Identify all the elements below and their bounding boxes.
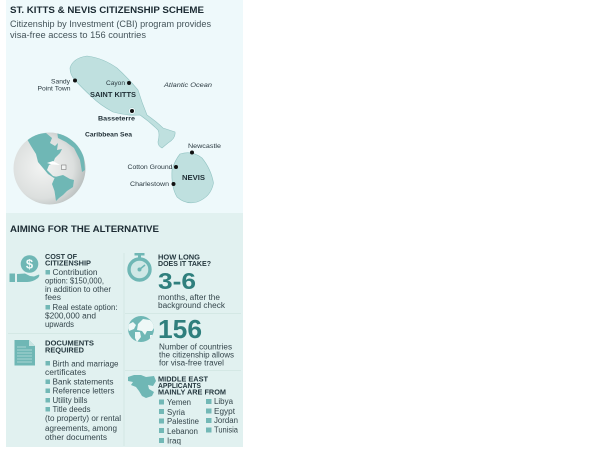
list: column one: Syria <box>167 408 186 417</box>
map labels: Atlantic Ocean <box>163 82 212 89</box>
description <box>159 342 234 368</box>
list: column two: Egypt <box>214 407 236 416</box>
list <box>45 360 121 442</box>
south america <box>52 175 74 201</box>
list: Title deeds <box>52 405 90 414</box>
marker: Cayon <box>127 81 131 85</box>
marker: Charlestown <box>172 182 176 186</box>
panel: middle east applicants: MAINLY ARE FROM <box>158 388 226 396</box>
panel: map section background <box>6 0 243 213</box>
list: column one: Lebanon <box>167 427 198 436</box>
panel: how long does it take: DOES IT TAKE? <box>158 259 211 268</box>
list: (to property) or rental <box>45 414 121 423</box>
list: Bank statements <box>52 378 114 386</box>
locator box <box>62 165 66 170</box>
description <box>158 293 226 310</box>
stat: 156: 156 <box>158 316 202 344</box>
panel: cost of citizenship <box>10 252 118 329</box>
list: in addition to other <box>45 285 111 294</box>
marker: Sandy Point Town <box>73 78 77 82</box>
greenland and right edge <box>57 130 85 172</box>
map labels: Sandy <box>51 78 71 86</box>
icon: world globe <box>128 316 154 342</box>
subtitle <box>10 19 212 40</box>
panel: documents required: REQUIRED <box>45 346 84 354</box>
panel: documents required <box>14 338 121 442</box>
list: option: $150,000, <box>45 276 104 286</box>
stat: 3-6: 3-6 <box>158 268 196 294</box>
map labels: Charlestown <box>130 181 169 188</box>
map labels: Cotton Ground <box>128 164 173 171</box>
heading: HOW LONG <box>158 252 200 262</box>
map labels: NEVIS <box>182 173 205 182</box>
map labels: Caribbean Sea <box>85 132 132 138</box>
list: column two: Jordan <box>214 416 238 425</box>
subtitle: Citizenship by Investment (CBI) program provides <box>10 19 212 29</box>
list: column one <box>159 398 200 446</box>
panel: middle east applicants <box>128 374 239 446</box>
map: Saint Kitts island <box>70 56 175 148</box>
list: column two: Tunisia <box>214 426 239 434</box>
list: fees <box>45 293 61 302</box>
list: $200,000 and <box>45 312 96 320</box>
list: Utility bills <box>52 396 88 405</box>
description: for visa-free travel <box>159 358 224 368</box>
section heading: AIMING FOR THE ALTERNATIVE <box>10 223 159 234</box>
description: the citizenship allows <box>159 350 234 360</box>
list: Reference letters <box>52 386 114 396</box>
list: agreements, among <box>45 424 117 433</box>
title: ST. KITTS & NEVIS CITIZENSHIP SCHEME <box>10 4 204 15</box>
list <box>45 268 118 329</box>
map labels: Cayon <box>106 80 125 87</box>
list: other documents <box>45 433 107 442</box>
map labels: Basseterre <box>98 116 135 122</box>
icon: stopwatch <box>129 253 150 280</box>
north america <box>27 133 62 178</box>
icon: middle east map <box>128 375 156 398</box>
icon: document <box>14 340 35 366</box>
heading: COST OF <box>45 252 78 261</box>
map labels: Newcastle <box>188 143 221 150</box>
map labels: SAINT KITTS <box>90 90 136 99</box>
list: column two <box>206 397 239 434</box>
map: Nevis island <box>172 150 214 203</box>
map labels <box>38 78 221 188</box>
list: column two: Libya <box>214 397 234 406</box>
marker: Basseterre <box>129 108 135 114</box>
heading: DOCUMENTS <box>45 338 94 348</box>
description: Number of countries <box>159 342 232 352</box>
list: certificates <box>45 368 86 377</box>
list: column one: Iraq <box>167 436 181 446</box>
panel: cost of citizenship: CITIZENSHIP <box>45 258 91 268</box>
marker: Cotton Ground <box>174 165 178 169</box>
panel: how long does it take <box>129 252 226 310</box>
map labels: Point Town <box>38 86 71 92</box>
list: upwards <box>45 320 74 329</box>
icon: hand with dollar coin: $ <box>26 256 34 272</box>
list: Birth and marriage <box>52 360 119 368</box>
heading: MIDDLE EAST <box>158 374 209 384</box>
description: background check <box>158 301 226 310</box>
subtitle: visa-free access to 156 countries <box>10 30 147 40</box>
panel: alternative section background <box>6 213 243 447</box>
panel: number of countries <box>127 316 234 368</box>
list: Contribution <box>52 268 98 277</box>
list: column one: Yemen <box>167 398 191 407</box>
list: Real estate option: <box>52 303 118 312</box>
caribbean islands <box>47 161 60 165</box>
marker: Newcastle <box>190 150 194 154</box>
panel: middle east applicants: APPLICANTS <box>158 381 201 390</box>
description: months, after the <box>158 293 221 302</box>
list: column one: Palestine <box>167 417 200 426</box>
globe inset <box>14 130 86 204</box>
